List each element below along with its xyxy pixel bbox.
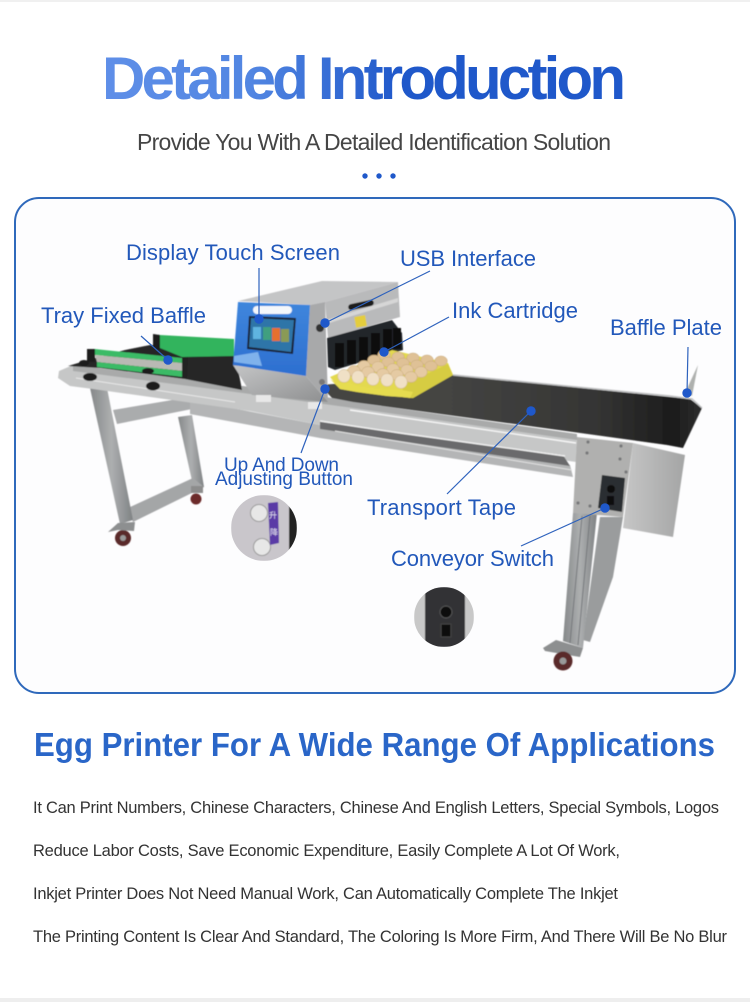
callout: Ink Cartridge: Ink Cartridge — [452, 298, 578, 323]
right leg and switch box — [543, 437, 685, 670]
callout: USB Interface: USB Interface — [400, 246, 536, 271]
inset: up and down buttons: 降 — [270, 527, 278, 537]
callout: Ink Cartridge — [379, 298, 578, 357]
callout: Conveyor Switch: Conveyor Switch — [391, 546, 554, 571]
callout: Tray Fixed Baffle: Tray Fixed Baffle — [41, 303, 206, 328]
callout: Display Touch Screen — [126, 240, 340, 324]
callout: Up And Down Adjusting Button: Adjusting Button — [215, 469, 353, 490]
section heading: Egg Printer For A Wide Range Of Applications — [34, 726, 715, 763]
left belt and baffles — [68, 334, 242, 390]
callout: Tray Fixed Baffle — [41, 303, 206, 365]
callout: Baffle Plate — [610, 315, 722, 398]
rear leg and crossbars — [90, 388, 204, 546]
egg tray with eggs — [330, 350, 453, 398]
callout: Up And Down Adjusting Button — [215, 384, 353, 490]
body text — [33, 799, 728, 946]
callout: Baffle Plate: Baffle Plate — [610, 315, 722, 340]
decorative dots — [362, 173, 396, 179]
callout: Up And Down Adjusting Button: Up And Down — [224, 455, 339, 476]
callout: Transport Tape — [367, 406, 536, 520]
egg printer conveyor machine — [58, 281, 702, 670]
body line 1: It Can Print Numbers, Chinese Characters, Chinese And English Letters, Special Symbols, Logos — [33, 799, 719, 817]
callout: USB Interface — [320, 246, 536, 328]
body line 3: Inkjet Printer Does Not Need Manual Work, Can Automatically Complete The Inkjet — [33, 885, 618, 903]
inset: up and down buttons — [231, 495, 297, 561]
subtitle: Provide You With A Detailed Identification Solution — [137, 129, 611, 155]
inset: conveyor switch — [414, 587, 474, 647]
conveyor side beam — [58, 365, 577, 477]
right belt — [320, 375, 702, 448]
panel: machine diagram — [15, 198, 735, 693]
title: Detailed Introduction — [102, 45, 626, 112]
callout: Display Touch Screen: Display Touch Screen — [126, 240, 340, 265]
body line 4: The Printing Content Is Clear And Standard, The Coloring Is More Firm, And There Will Be No Blur — [33, 928, 728, 946]
inset: up and down buttons: 升 — [269, 511, 277, 520]
body line 2: Reduce Labor Costs, Save Economic Expenditure, Easily Complete A Lot Of Work, — [33, 842, 620, 860]
callout: Transport Tape: Transport Tape — [367, 495, 516, 520]
printer head — [233, 281, 403, 409]
callout: Conveyor Switch — [391, 503, 610, 571]
